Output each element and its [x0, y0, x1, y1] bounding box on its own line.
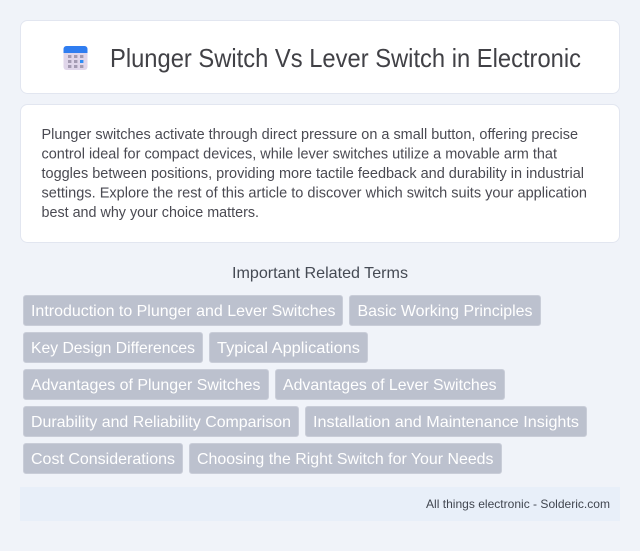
tag: advantages of lever switches — [276, 370, 504, 400]
tag: introduction: Introduction to Plunger and Lever Switches — [31, 303, 336, 320]
tag: key design differences — [24, 332, 202, 362]
tag: advantages of lever switches: Advantages of Lever Switches — [283, 377, 496, 394]
tag: introduction — [24, 296, 342, 326]
panel: summary paragraph — [20, 104, 620, 242]
tag: typical applications — [210, 332, 368, 362]
tag list — [24, 296, 586, 474]
tag: choosing the right switch — [190, 444, 502, 474]
tag: advantages of plunger switches: Advantages of Plunger Switches — [31, 377, 260, 394]
panel: summary paragraph: Plunger switches activate through direct pressure on a small button, offering precise — [42, 127, 578, 143]
tag: choosing the right switch: Choosing the Right Switch for Your Needs — [197, 451, 494, 468]
footer bar — [20, 487, 620, 521]
title: Plunger Switch Vs Lever Switch in Electronic — [110, 45, 581, 73]
tag: cost considerations — [24, 444, 182, 474]
tag: durability and reliability comparison — [24, 406, 298, 436]
panel: title card — [20, 20, 620, 94]
tag: typical applications: Typical Applications — [217, 340, 360, 357]
panel: summary paragraph: toggles between positions, providing more tactile feedback and durability in industrial — [42, 166, 584, 182]
tag: basic working principles: Basic Working Principles — [358, 303, 532, 320]
tag: installation and maintenance insights: Installation and Maintenance Insights — [313, 414, 579, 431]
panel: summary paragraph: settings. Explore the rest of this article to discover which switch suits your application — [42, 186, 587, 202]
panel: summary paragraph: control ideal for compact devices, while lever switches utilize a movable arm that — [42, 146, 557, 162]
tag: durability and reliability comparison: Durability and Reliability Comparison — [31, 414, 291, 431]
heading: important related terms: Important Related Terms — [232, 265, 408, 282]
tag: installation and maintenance insights — [306, 406, 586, 436]
tag: key design differences: Key Design Differences — [31, 340, 195, 357]
tag: cost considerations: Cost Considerations — [31, 451, 175, 468]
icon: calendar grid — [64, 46, 88, 70]
tag: basic working principles — [350, 296, 540, 326]
tag: advantages of plunger switches — [24, 370, 268, 400]
panel: summary paragraph: best and why your choice matters. — [42, 205, 259, 221]
footer bar: All things electronic - Solderic.com — [426, 497, 610, 511]
